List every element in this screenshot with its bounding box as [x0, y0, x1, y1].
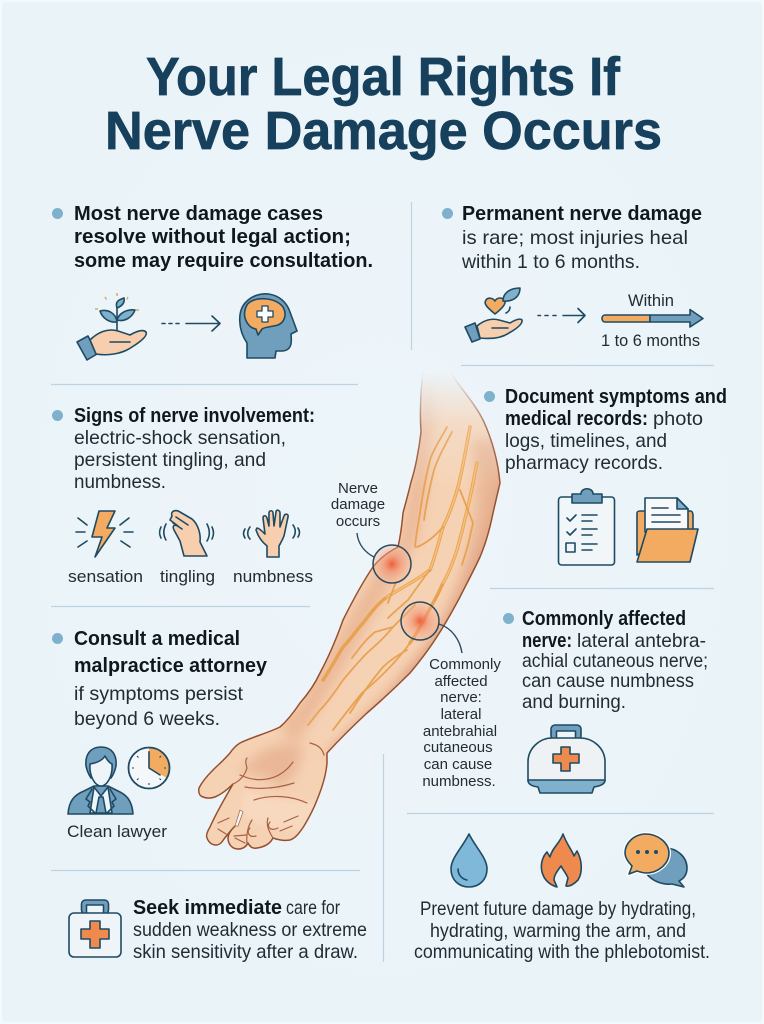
- icon: head with brain: [240, 294, 297, 358]
- text block: seek immediate care: care for: [286, 897, 340, 919]
- callout: commonly affected nerve: [401, 602, 501, 790]
- bullet: [52, 633, 63, 644]
- title: Nerve Damage Occurs: [105, 102, 662, 161]
- text block: prevent future damage: communicating with the phlebotomist.: [414, 941, 710, 963]
- chart: timeline arrow within 1 to 6 months: [601, 292, 703, 350]
- panel: prevent future damage: [414, 834, 710, 963]
- gap between fingers: [235, 810, 243, 826]
- text block: document symptoms: pharmacy records.: [505, 452, 663, 474]
- text block: prevent future damage: Prevent future damage by hydrating,: [420, 898, 696, 920]
- text block: permanent nerve damage: within 1 to 6 months.: [461, 251, 640, 273]
- text block: commonly affected nerve: [522, 608, 708, 713]
- bullet: [442, 208, 453, 219]
- callout: nerve damage occurs: [331, 480, 411, 583]
- text block: consult attorney: if symptoms persist: [74, 683, 244, 705]
- text block: prevent future damage: hydrating, warming the arm, and: [430, 920, 686, 942]
- text block: commonly affected nerve: and burning.: [522, 691, 626, 713]
- marker: upper damage site: [373, 545, 411, 583]
- arrow: dashed: [538, 308, 585, 322]
- icon: lawyer: [68, 747, 133, 814]
- text block: signs: numbness.: [74, 471, 166, 493]
- text block: commonly affected nerve: Commonly affected: [522, 608, 686, 630]
- text block: seek immediate care: skin sensitivity after a draw.: [133, 941, 358, 963]
- text block: prevent future damage: [414, 898, 710, 963]
- chart: timeline arrow within 1 to 6 months: 1 to 6 months: [601, 332, 700, 350]
- label: commonly affected nerve: nerve:: [440, 689, 482, 706]
- label: commonly affected nerve: cutaneous: [423, 739, 493, 756]
- leader line: [439, 624, 462, 653]
- text block: permanent nerve damage: [461, 203, 702, 273]
- icon: numbness hand: [244, 510, 300, 557]
- illustration: arm with nerves: [199, 372, 512, 849]
- text block: seek immediate care: Seek immediate: [133, 897, 282, 919]
- bullet: [503, 613, 514, 624]
- text block: most cases resolve: [74, 203, 373, 272]
- icon: flame: [541, 834, 581, 887]
- skin shading: [242, 405, 500, 829]
- text block: seek immediate care: sudden weakness or extreme: [133, 919, 367, 941]
- leader line: [357, 533, 374, 557]
- nerves: [308, 427, 477, 730]
- label: commonly affected nerve: [422, 656, 501, 790]
- text block: most cases resolve: Most nerve damage cases: [74, 203, 323, 225]
- icon: folder with document: [637, 498, 698, 562]
- text block: consult attorney: malpractice attorney: [74, 655, 268, 677]
- marker: lower damage site: [401, 602, 439, 640]
- icon: clock: [128, 748, 170, 788]
- text block: signs: persistent tingling, and: [74, 449, 266, 471]
- hand creases: [218, 743, 324, 843]
- label: commonly affected nerve: affected: [434, 673, 488, 690]
- text block: commonly affected nerve: lateral antebra-: [577, 630, 706, 652]
- text block: permanent nerve damage: is rare; most injuries heal: [462, 227, 688, 249]
- bullet: [52, 410, 63, 421]
- icon: hand holding plant: [77, 293, 146, 360]
- panel: document symptoms: [484, 386, 727, 565]
- panel: most cases resolve: [52, 203, 373, 360]
- label: commonly affected nerve: lateral: [441, 706, 481, 723]
- text block: document symptoms: photo: [653, 408, 703, 430]
- panel: permanent nerve damage: [442, 203, 703, 350]
- label: sensation: sensation: [68, 568, 143, 586]
- icon: lightning sensation: [76, 511, 133, 557]
- icon: clipboard checklist: [558, 489, 614, 565]
- text block: commonly affected nerve: nerve:: [522, 630, 572, 652]
- bullet: [484, 391, 495, 402]
- icon: medical bag: [528, 725, 605, 793]
- text block: commonly affected nerve: achial cutaneous nerve;: [522, 650, 708, 672]
- text block: document symptoms: Document symptoms and: [505, 386, 727, 408]
- icon: speech bubbles: [625, 834, 687, 887]
- label: nerve damage occurs: Nerve: [338, 480, 378, 497]
- text block: consult attorney: [74, 628, 268, 730]
- chart: timeline arrow within 1 to 6 months: Within: [628, 292, 674, 310]
- title: [105, 48, 662, 161]
- label: commonly affected nerve: numbness.: [422, 773, 496, 790]
- panel: consult attorney: [52, 628, 268, 841]
- text block: document symptoms: logs, timelines, and: [505, 430, 667, 452]
- icon: first aid case: [69, 900, 121, 957]
- label: nerve damage occurs: [331, 480, 385, 530]
- text block: signs: [74, 405, 315, 493]
- label: commonly affected nerve: Commonly: [429, 656, 501, 673]
- icon: water drop: [451, 834, 487, 887]
- panel: signs of nerve involvement: [52, 405, 315, 586]
- panel: seek immediate care: [69, 897, 367, 963]
- panel: commonly affected nerve: [503, 608, 708, 793]
- text block: most cases resolve: resolve without legal action;: [74, 226, 351, 248]
- title: Your Legal Rights If: [146, 48, 620, 107]
- label: numbness: numbness: [233, 568, 313, 586]
- label: commonly affected nerve: can cause: [424, 756, 492, 773]
- text block: commonly affected nerve: can cause numbness: [522, 670, 694, 692]
- arrow: dashed: [162, 316, 220, 331]
- label: nerve damage occurs: damage: [331, 496, 385, 513]
- text block: most cases resolve: some may require consultation.: [74, 250, 373, 272]
- label: nerve damage occurs: occurs: [336, 513, 380, 530]
- bullet: [52, 208, 63, 219]
- text block: permanent nerve damage: Permanent nerve damage: [462, 203, 702, 225]
- label: tingling: tingling: [160, 568, 215, 586]
- text block: document symptoms: medical records:: [505, 408, 648, 430]
- label: clean lawyer: Clean lawyer: [67, 823, 168, 841]
- text block: document symptoms: [505, 386, 727, 474]
- text block: signs: Signs of nerve involvement:: [74, 405, 315, 427]
- text block: consult attorney: beyond 6 weeks.: [74, 708, 220, 730]
- text block: seek immediate care: [133, 897, 367, 963]
- text block: signs: electric-shock sensation,: [74, 427, 286, 449]
- text block: consult attorney: Consult a medical: [74, 628, 240, 650]
- label: commonly affected nerve: antebrahial: [423, 723, 497, 740]
- icon: tingling hand: [160, 511, 214, 556]
- icon: hand with heart: [465, 288, 522, 342]
